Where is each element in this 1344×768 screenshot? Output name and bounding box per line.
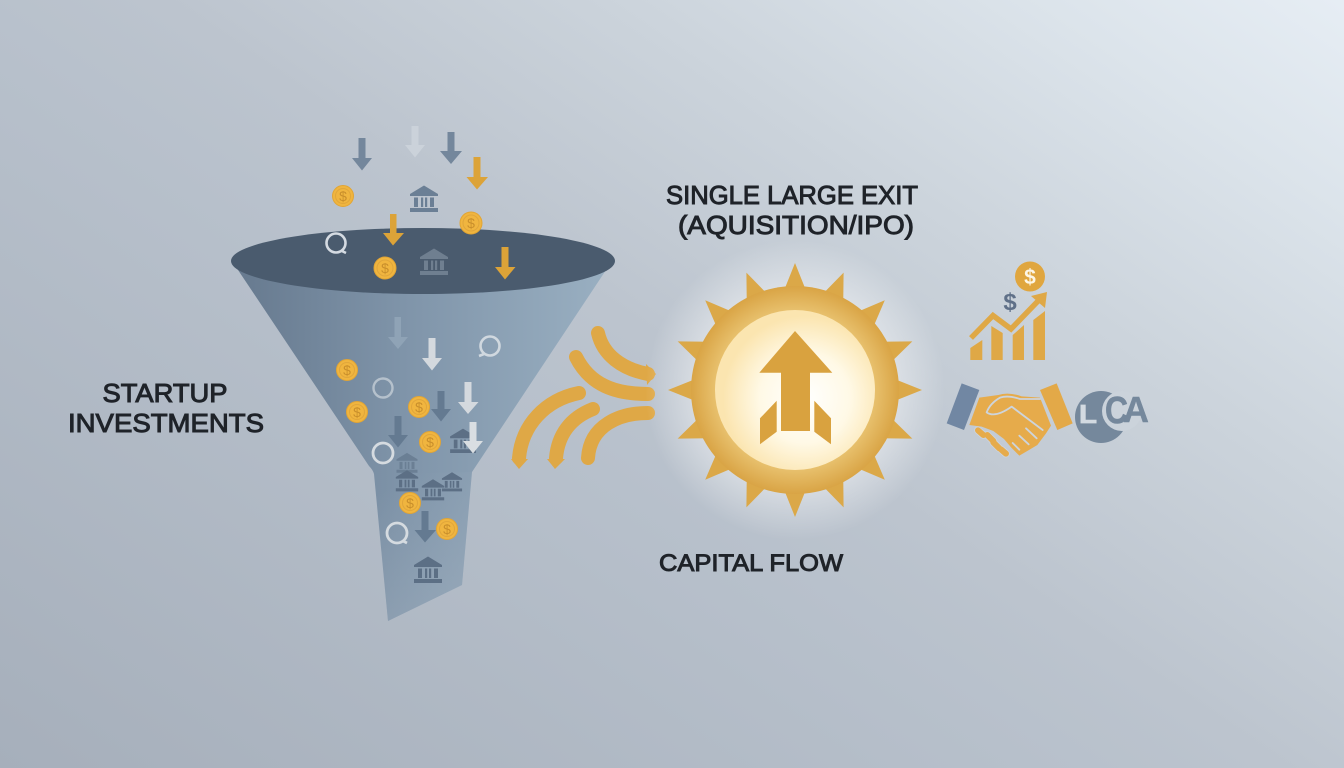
left hand fingers (978, 430, 1006, 454)
trend arrow (971, 292, 1047, 338)
coin (460, 212, 482, 234)
logo letters: C (1105, 390, 1128, 432)
label: startup investments (68, 378, 264, 438)
logo letters: L (1079, 399, 1097, 429)
slate dollar sign: $ (1003, 289, 1017, 316)
sun outer ring (691, 286, 899, 494)
rocket arrow icon (759, 331, 832, 444)
flow arrow 4 (547, 409, 593, 469)
flow arrow 1 (598, 333, 656, 385)
logo letters (1079, 389, 1149, 432)
coin (374, 257, 396, 279)
coin (420, 432, 440, 452)
coin (436, 518, 458, 540)
arrow: pale (458, 382, 478, 414)
arrow: dark (388, 416, 408, 448)
funnel body (232, 261, 612, 621)
logo C cutout (1102, 391, 1142, 431)
ring (387, 523, 407, 543)
ring: in funnel opening (326, 234, 346, 253)
label: single large exit (666, 180, 918, 240)
arrow: faint (388, 317, 408, 349)
coin: $ (426, 434, 434, 450)
coin: $ (381, 260, 389, 276)
logo: LCA (1075, 389, 1149, 443)
arrow: pale (422, 338, 442, 370)
bank icon (450, 429, 476, 453)
bank icon: in funnel opening (420, 248, 448, 275)
coin (346, 402, 368, 422)
bank icon (442, 472, 462, 491)
coin: $ (467, 215, 475, 231)
funnel body shading (374, 472, 472, 621)
funnel opening (231, 228, 615, 294)
capital flow arrows (511, 333, 656, 469)
bank icon (396, 470, 418, 491)
arrow: pale (405, 126, 425, 158)
ring (374, 378, 392, 398)
arrow: slate (352, 138, 372, 170)
flow arrow 5 (511, 393, 579, 469)
icon: handshake (947, 383, 1073, 456)
logo circle (1075, 391, 1127, 443)
left cuff (947, 383, 979, 430)
coin (332, 186, 354, 206)
arrow: dark (414, 511, 436, 542)
flow arrow 2 (576, 357, 648, 394)
sun inner disc (715, 310, 875, 470)
coin (400, 492, 420, 514)
label: startup investments: INVESTMENTS (68, 408, 264, 438)
arrow: gold (495, 247, 516, 280)
coins above the funnel (332, 186, 482, 279)
flow arrow 3 (588, 413, 648, 458)
sun spikes (668, 263, 922, 517)
bank icon (414, 556, 442, 583)
items inside the funnel (336, 317, 483, 583)
hand outlines (987, 397, 1043, 450)
logo letters: A (1123, 389, 1149, 430)
coin (408, 396, 430, 418)
gold dollar coin: $ (1024, 266, 1036, 289)
coin: $ (406, 495, 414, 511)
coin (336, 360, 358, 380)
ring: upper funnel (479, 336, 500, 356)
right cuff (1040, 383, 1073, 430)
label: capital flow: CAPITAL FLOW (659, 550, 843, 577)
coin: $ (339, 188, 347, 204)
coin: $ (443, 521, 451, 537)
sun glow (645, 240, 945, 540)
chart bars (970, 311, 1045, 360)
label: startup investments: STARTUP (102, 378, 228, 408)
label: single large exit: (AQUISITION/IPO) (678, 210, 914, 240)
bank icon (422, 479, 444, 500)
clasped hands (969, 394, 1051, 456)
coin: $ (343, 362, 351, 378)
icon: growth chart (970, 262, 1047, 360)
bank icon (396, 453, 418, 473)
ring (373, 443, 393, 463)
funnel (231, 228, 615, 621)
coin: $ (353, 404, 361, 420)
label: single large exit: SINGLE LARGE EXIT (666, 180, 918, 210)
sun with rocket (668, 263, 922, 517)
arrow: gold (466, 157, 488, 190)
arrow: gold (383, 214, 404, 246)
bank icon: above funnel (410, 186, 438, 212)
falling arrows above the funnel (352, 126, 516, 280)
arrow: pale over bank (463, 422, 483, 454)
arrow: slate (440, 132, 462, 164)
arrow: dark (431, 391, 451, 422)
coin: $ (415, 399, 423, 415)
